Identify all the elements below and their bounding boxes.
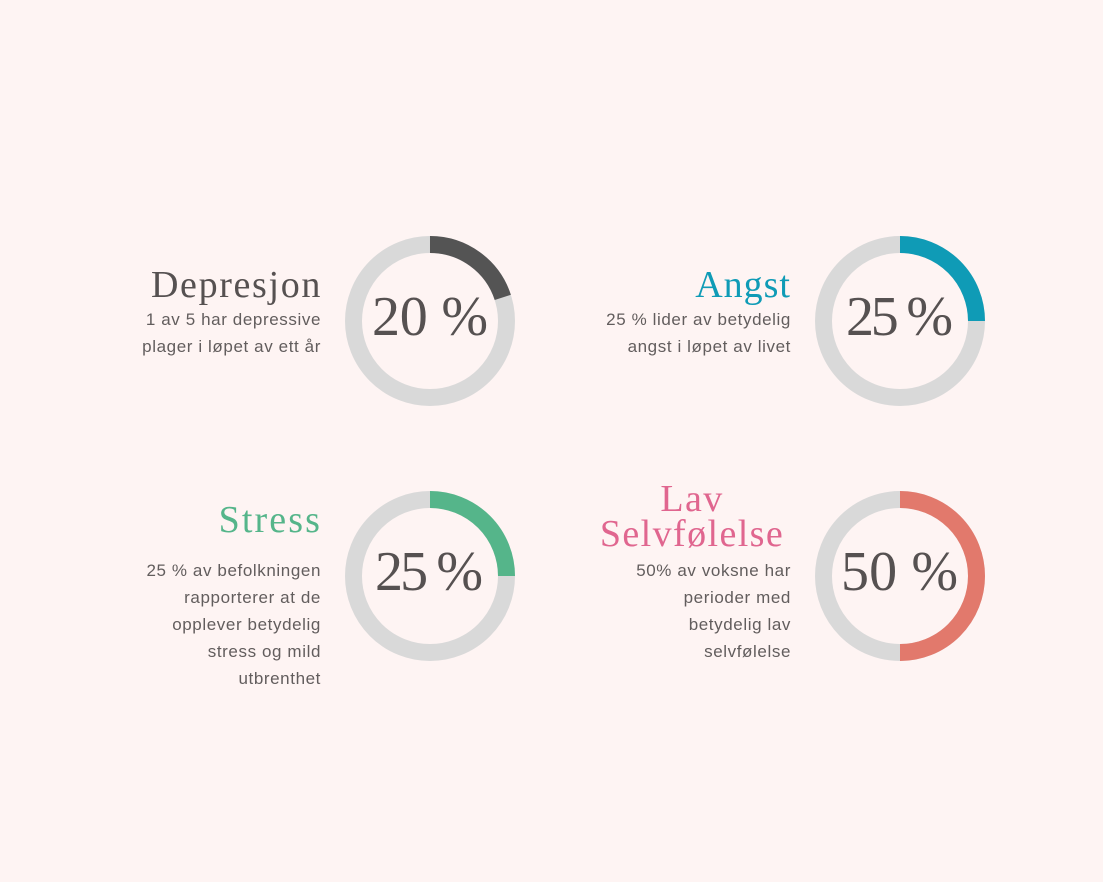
text: Lav Selvfølelse description: 50% av voksne har <box>636 561 791 580</box>
heading: Lav Selvfølelse <box>600 478 784 555</box>
text: Lav Selvfølelse description <box>636 561 791 661</box>
donut: Depresjon 20%: 20 % <box>372 286 488 348</box>
text: Depresjon description: plager i løpet av ett år <box>142 337 321 356</box>
text: Stress description: 25 % av befolkningen <box>146 561 321 580</box>
heading: Lav Selvfølelse: Selvfølelse <box>600 513 784 555</box>
text: Stress description <box>146 561 321 688</box>
text: Depresjon description <box>142 310 321 356</box>
text: Angst description: angst i løpet av livet <box>628 337 791 356</box>
donut: Stress 25%: 25 % <box>375 541 483 603</box>
donut: Angst 25% <box>824 244 976 398</box>
text: Stress description: stress og mild <box>208 642 321 661</box>
donut: Lav Selvfølelse 50%: 50 % <box>841 541 958 603</box>
heading: Lav Selvfølelse: Lav <box>660 478 724 520</box>
text: Stress description: utbrenthet <box>238 669 321 688</box>
text: Angst description <box>606 310 791 356</box>
text: Depresjon description: 1 av 5 har depressive <box>146 310 321 329</box>
heading: Angst: Angst <box>695 264 791 306</box>
donut: Lav Selvfølelse 50% <box>824 500 976 652</box>
text: Stress description: rapporterer at de <box>184 588 321 607</box>
donut: Stress 25% <box>354 500 506 652</box>
text: Stress description: opplever betydelig <box>172 615 321 634</box>
donut: Angst 25%: 25 % <box>846 286 953 348</box>
heading: Depresjon: Depresjon <box>151 264 322 306</box>
text: Lav Selvfølelse description: perioder med <box>684 588 791 607</box>
text: Lav Selvfølelse description: selvfølelse <box>704 642 791 661</box>
text: Angst description: 25 % lider av betydelig <box>606 310 791 329</box>
heading: Stress: Stress <box>219 499 322 541</box>
text: Lav Selvfølelse description: betydelig lav <box>689 615 791 634</box>
donut: Depresjon 20% <box>354 244 506 398</box>
